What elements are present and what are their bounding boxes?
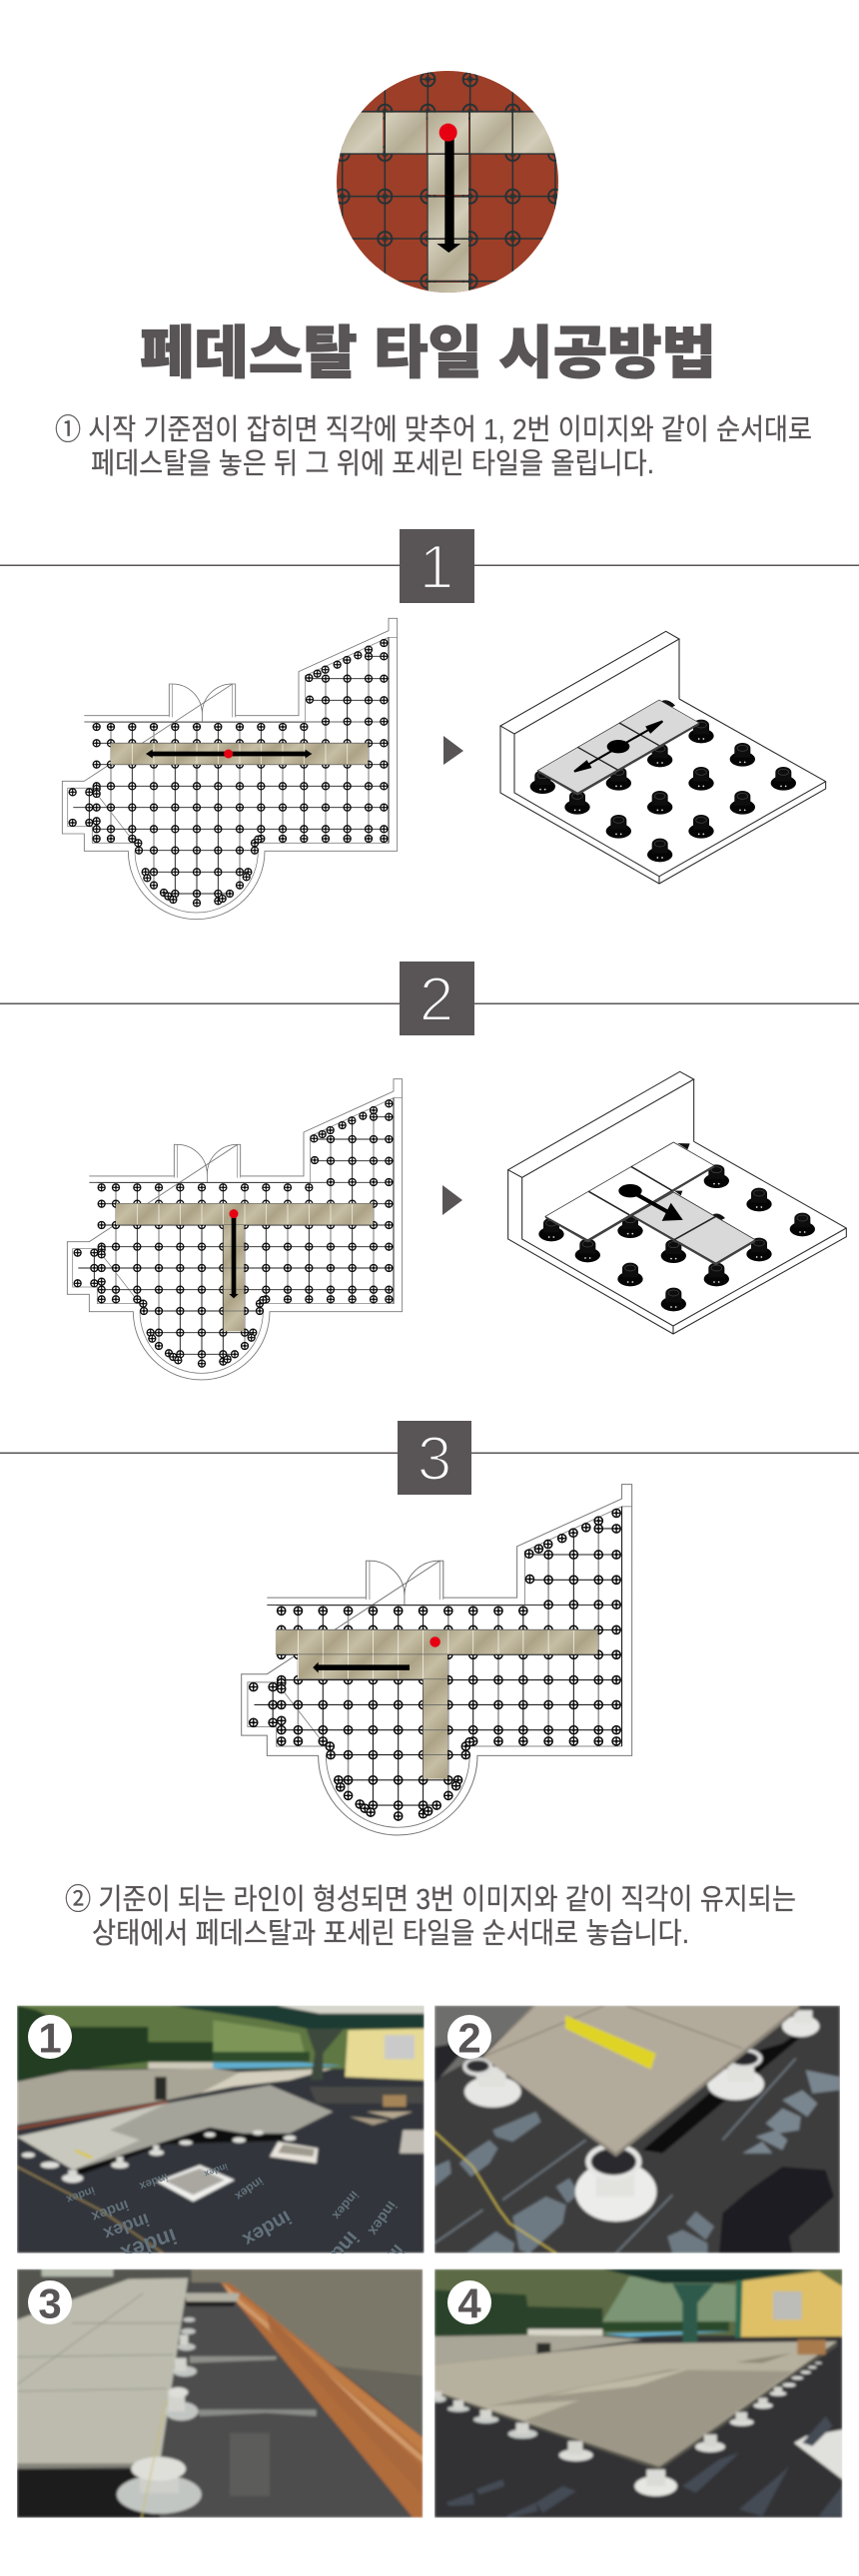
membrane logo prints: index	[101, 2210, 152, 2245]
badge 4: 4	[457, 2279, 481, 2326]
membrane logo prints: index	[330, 2188, 362, 2223]
badge 1	[28, 2014, 72, 2061]
arrow: horizontal both ways	[146, 750, 312, 758]
membrane logo prints: index	[117, 2224, 180, 2266]
membrane logo bands	[446, 2416, 842, 2518]
badge 4	[447, 2279, 491, 2326]
section header 2	[0, 962, 859, 1035]
badge 3	[28, 2279, 72, 2326]
section header 3	[0, 1421, 859, 1495]
tile	[482, 2006, 799, 2157]
membrane logo prints: index	[363, 2241, 409, 2289]
floor plan 3	[242, 1485, 632, 1835]
membrane logo prints: index	[64, 2184, 96, 2206]
text block: second instruction: 상태에서 페데스탈과 포세린 타일을 순서대로 놓습니다.	[92, 1917, 689, 1950]
section header 1: 1	[420, 533, 453, 602]
photo 3: tile edge and gutter	[17, 2269, 423, 2518]
pedestals	[117, 2475, 202, 2514]
pedestals	[464, 2076, 521, 2108]
membrane logo prints: index	[137, 2171, 170, 2192]
membrane logo prints: index	[239, 2206, 295, 2251]
title: 페데스탈 타일 시공방법	[140, 322, 716, 385]
floor plan 2	[67, 1079, 403, 1380]
arrow: along tile row	[574, 721, 662, 772]
arrow: isometric direction	[630, 1191, 679, 1219]
badge 2	[447, 2014, 491, 2061]
text block: second instruction: ② 기준이 되는 라인이 형성되면 3번 이미지와 같이 직각이 유지되는	[65, 1883, 796, 1916]
arrow: step 1 to diagram	[443, 736, 463, 765]
level	[565, 2015, 656, 2070]
section header 2: 2	[420, 966, 453, 1034]
text block: second instruction	[65, 1883, 796, 1950]
membrane logo prints: index	[311, 2227, 364, 2283]
membrane logo prints: index	[364, 2198, 400, 2239]
section header 3: 3	[418, 1425, 451, 1494]
photo 2: tile with spirit level	[434, 2006, 840, 2254]
membrane logo prints	[66, 2164, 406, 2254]
section header 1	[0, 529, 859, 603]
membrane logo prints: index	[161, 2250, 212, 2284]
floor plan 1	[62, 618, 398, 920]
isometric diagram 1	[500, 631, 826, 884]
arrow: downward	[229, 1216, 239, 1298]
arrow: step 2 to diagram	[442, 1185, 462, 1215]
text block: intro instruction	[55, 413, 812, 480]
membrane logo prints: index	[232, 2175, 266, 2204]
text block: intro instruction: 페데스탈을 놓은 뒤 그 위에 포세린 타일을 올립니다.	[91, 447, 654, 480]
icon: circular tile layout	[337, 71, 558, 293]
logo blobs	[459, 2140, 497, 2177]
badge 2: 2	[457, 2014, 481, 2061]
membrane logo prints: index	[89, 2197, 131, 2225]
photo 1: pedestals on roof membrane	[17, 2005, 425, 2254]
isometric diagram 2	[508, 1071, 846, 1334]
tile surface	[17, 2278, 188, 2463]
pedestals	[431, 2395, 446, 2402]
badge 3: 3	[38, 2279, 62, 2326]
arrow: leftward	[313, 1662, 410, 1673]
badge 1: 1	[38, 2014, 62, 2061]
membrane logo prints: index	[202, 2162, 229, 2180]
photo 4: completed tile floor	[431, 2269, 842, 2518]
